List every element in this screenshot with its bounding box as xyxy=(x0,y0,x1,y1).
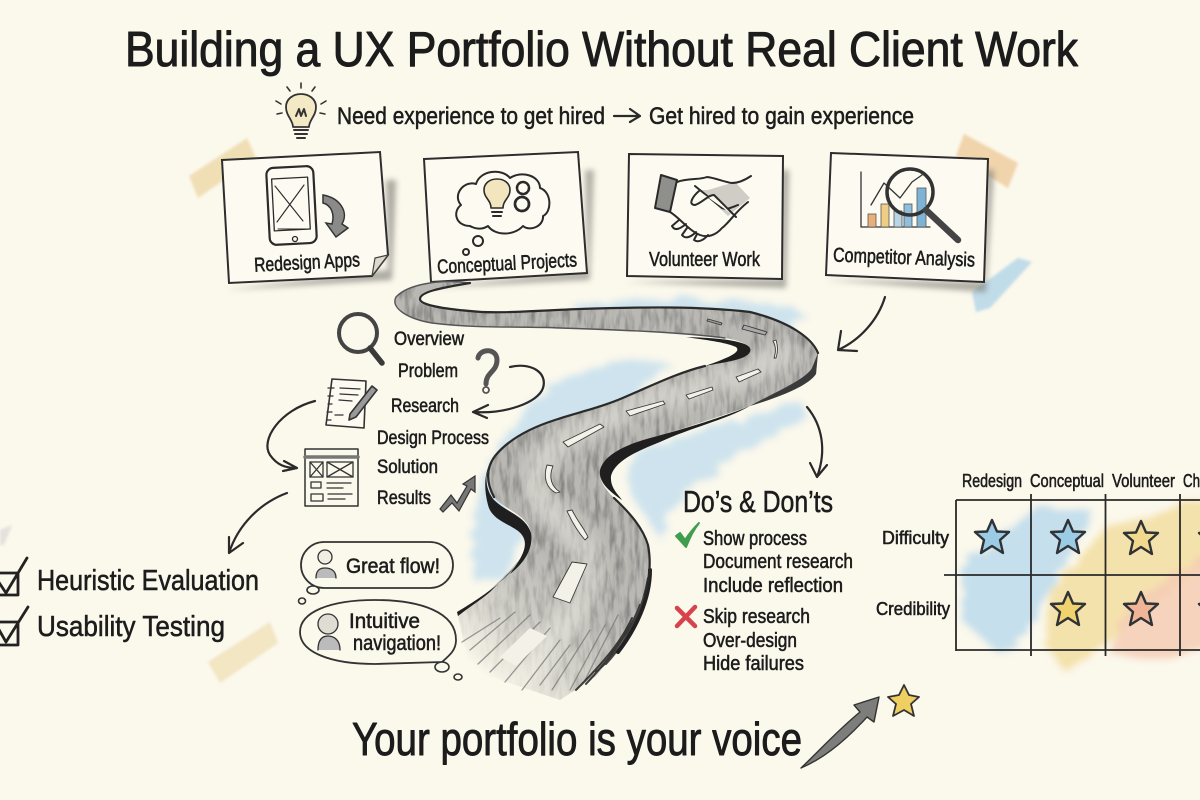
icon: notebook and pencil xyxy=(326,379,377,428)
road outline strokes xyxy=(395,282,818,595)
row headers xyxy=(876,528,950,619)
icon: red x xyxy=(677,607,695,626)
arrow: pencil rising xyxy=(801,697,879,768)
label: Conceptual Projects xyxy=(437,249,578,279)
checkbox 2 xyxy=(0,607,28,645)
arrow: road to do's and don'ts xyxy=(807,407,827,477)
case study list xyxy=(229,314,544,553)
evaluation checklist xyxy=(0,558,259,645)
don't list: Skip research xyxy=(703,606,810,628)
matrix chart xyxy=(876,471,1200,672)
arrow: problem to research xyxy=(473,366,544,418)
icon: thought cloud xyxy=(456,172,549,255)
road highlight xyxy=(520,345,790,680)
icon: phone wireframe xyxy=(266,166,317,245)
don't list: Over-design xyxy=(703,630,797,652)
tape decorations xyxy=(189,134,1018,683)
icon: magnifier xyxy=(339,314,382,363)
do list: Document research xyxy=(703,551,853,573)
icon: person xyxy=(318,614,340,650)
column headers: Volunteer xyxy=(1112,471,1175,491)
label: Competitor Analysis xyxy=(833,245,975,271)
checkbox 1 xyxy=(0,558,27,595)
text: Great flow! xyxy=(346,555,440,578)
icon: green check xyxy=(676,523,699,547)
arrow: notebook to wireframe xyxy=(267,401,315,471)
icon: lightbulb xyxy=(276,83,326,138)
icon: handshake xyxy=(655,175,751,241)
label: Redesign Apps xyxy=(254,249,361,277)
panel: card conceptual projects xyxy=(424,152,594,288)
heading: Do’s & Don’ts xyxy=(683,484,833,519)
blue wash behind road xyxy=(473,299,806,582)
text design process: Design Process xyxy=(377,428,489,449)
do list xyxy=(703,528,853,597)
road lower streaks xyxy=(462,612,618,690)
speech bubble: great flow xyxy=(298,542,453,604)
panel: do's and don'ts xyxy=(676,484,853,675)
smudge left edge xyxy=(0,525,12,545)
text overview: Overview xyxy=(394,329,464,350)
icon: chart and magnifier xyxy=(861,169,958,240)
panel: card volunteer work xyxy=(625,154,789,288)
don't list xyxy=(703,606,810,675)
text usability testing: Usability Testing xyxy=(37,611,225,643)
closing statement: Your portfolio is your voice xyxy=(352,713,802,765)
text: Intuitive xyxy=(349,610,420,633)
text results: Results xyxy=(377,488,431,509)
speech bubble: intuitive navigation: navigation! xyxy=(353,632,441,655)
text heuristic evaluation: Heuristic Evaluation xyxy=(37,565,259,597)
row headers: Difficulty xyxy=(882,528,949,548)
panel: card redesign apps xyxy=(222,152,396,290)
subtitle left: Need experience to get hired xyxy=(337,103,605,130)
subtitle right: Get hired to gain experience xyxy=(649,103,914,130)
column headers xyxy=(962,471,1200,491)
do list: Show process xyxy=(703,528,807,550)
icon: question mark xyxy=(478,351,497,393)
speech bubble: intuitive navigation xyxy=(300,600,462,680)
road xyxy=(380,270,830,700)
blue tape xyxy=(972,258,1032,312)
icon: redo arrow xyxy=(323,195,348,237)
row headers: Credibility xyxy=(876,599,950,619)
road dark edges xyxy=(457,337,818,616)
colour washes xyxy=(962,500,1200,672)
panel: card competitor analysis xyxy=(824,153,994,292)
title: Building a UX Portfolio Without Real Client Work xyxy=(125,23,1078,77)
text problem: Problem xyxy=(398,361,458,382)
grid xyxy=(944,494,1200,656)
road right shadow wedge xyxy=(576,570,650,690)
column headers: Redesign xyxy=(962,471,1022,491)
icon: person xyxy=(316,550,336,578)
stars xyxy=(975,520,1200,625)
subtitle with lightbulb xyxy=(276,83,914,138)
text research: Research xyxy=(391,396,459,417)
road lane dashes xyxy=(500,319,778,666)
arrow: wireframe to methods xyxy=(229,493,287,553)
text solution: Solution xyxy=(377,457,438,478)
column headers: Conceptual xyxy=(1030,471,1104,491)
don't list: Hide failures xyxy=(703,653,804,675)
arrow: competitor to road xyxy=(838,297,885,351)
label: Volunteer Work xyxy=(649,249,761,271)
do list: Include reflection xyxy=(703,575,843,597)
arrow xyxy=(614,109,640,122)
icon: zigzag arrow xyxy=(440,476,475,512)
icon: wireframe window xyxy=(305,449,358,506)
icon: gold star xyxy=(888,685,919,716)
